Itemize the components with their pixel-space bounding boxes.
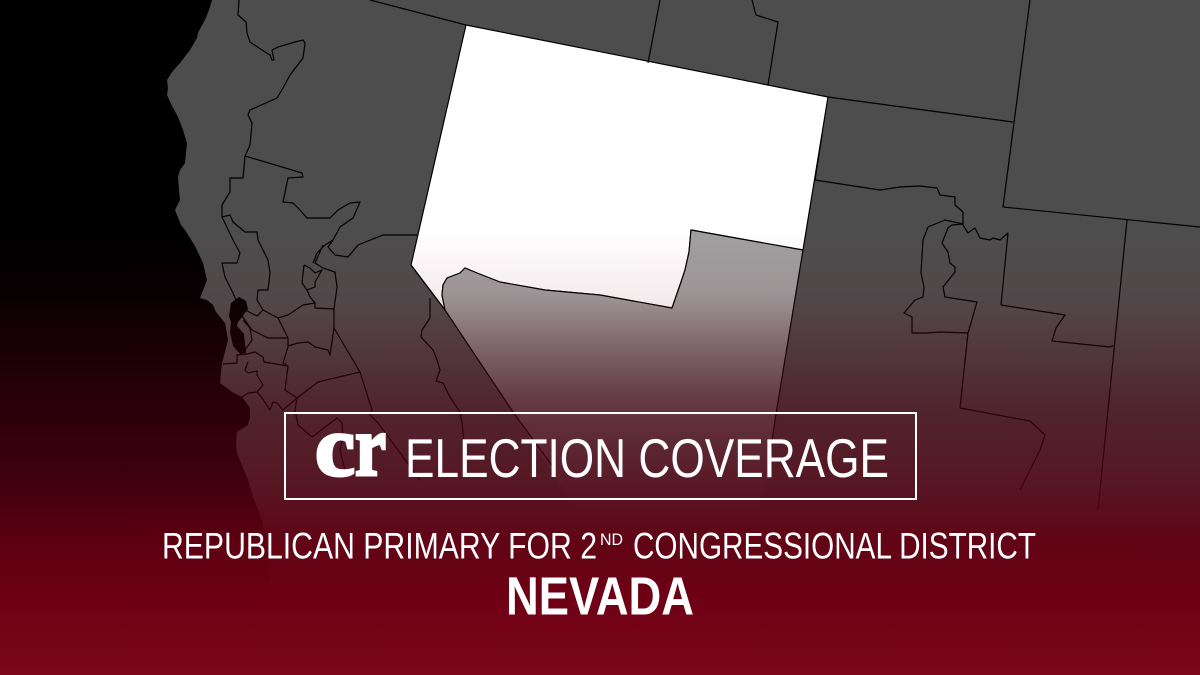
Nevada district 4 <box>442 230 803 510</box>
title box <box>285 398 916 499</box>
logo: cr <box>315 398 386 494</box>
box outline <box>285 413 916 499</box>
subtitle: ND <box>600 530 623 549</box>
logo: cr: c <box>315 398 355 494</box>
red gradient overlay <box>0 230 1200 675</box>
San Francisco Bay <box>229 297 248 354</box>
ocean <box>0 0 272 675</box>
subtitle <box>162 526 1036 566</box>
heading: election coverage: ELECTION COVERAGE <box>405 427 889 489</box>
logo: cr: r <box>355 398 386 494</box>
Nevada district 2 highlight <box>411 25 828 310</box>
subtitle: REPUBLICAN PRIMARY FOR 2 <box>162 526 597 566</box>
state name: NEVADA <box>506 566 694 626</box>
state and county borders <box>222 0 1200 510</box>
subtitle: CONGRESSIONAL DISTRICT <box>633 526 1036 566</box>
